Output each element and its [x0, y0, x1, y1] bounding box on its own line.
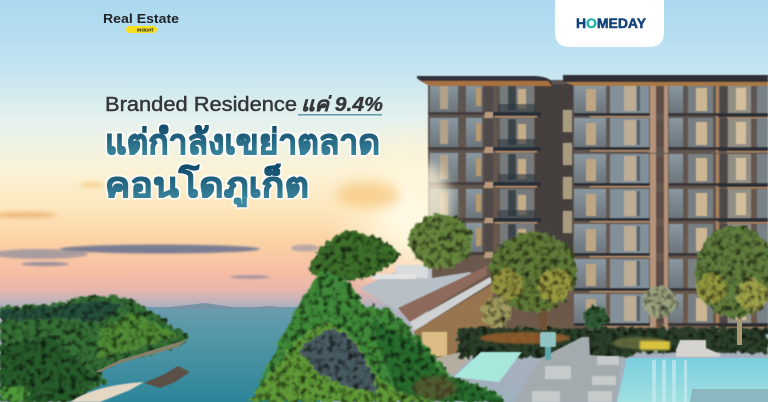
sea rock — [144, 366, 190, 388]
roofs — [417, 76, 552, 86]
title line 2: คอนโดภูเก็ต — [105, 163, 309, 207]
mossy mound — [247, 323, 440, 402]
heading — [105, 94, 383, 207]
small core windows — [563, 110, 572, 233]
left wing floors — [428, 83, 541, 258]
subtitle emphasis: แค่ 9.4% — [301, 94, 383, 116]
distant islands — [150, 303, 300, 309]
pool inner shade — [690, 389, 768, 402]
small pool — [454, 352, 522, 382]
tree: centre — [482, 232, 577, 330]
sea — [70, 307, 320, 402]
brand: Real Estate Insight — [103, 11, 179, 33]
insight tag: INSIGHT — [137, 28, 154, 32]
logo wordmark: HOMEDAY — [576, 16, 646, 31]
underline accent — [298, 114, 382, 116]
sun loungers — [532, 356, 619, 402]
left headland — [0, 295, 190, 402]
sunset clouds — [0, 182, 400, 279]
flower band — [480, 332, 670, 350]
sun glow — [323, 117, 513, 307]
terrace pavilion — [360, 265, 493, 374]
sun flare on tower edge — [406, 163, 450, 247]
beach — [70, 382, 144, 402]
brand wordmark: Real Estate — [103, 11, 179, 26]
right wing floors — [574, 84, 768, 329]
tree: rooftop — [409, 214, 473, 271]
deck — [514, 337, 622, 402]
building — [417, 75, 768, 330]
title line 1: แต่กำลังเขย่าตลาด — [105, 123, 380, 162]
foreground trees — [250, 231, 505, 402]
dark core — [535, 84, 573, 264]
logo card: HOMEDAY — [555, 0, 664, 47]
tree: right — [695, 226, 768, 345]
garden hedge — [458, 328, 768, 358]
daybed — [676, 340, 720, 357]
tower body — [428, 80, 768, 330]
small round shrubs — [584, 286, 677, 329]
pool steps — [652, 360, 687, 402]
main pool — [617, 358, 768, 402]
subtitle: Branded Residence — [105, 94, 297, 116]
garden lamp — [540, 332, 556, 360]
